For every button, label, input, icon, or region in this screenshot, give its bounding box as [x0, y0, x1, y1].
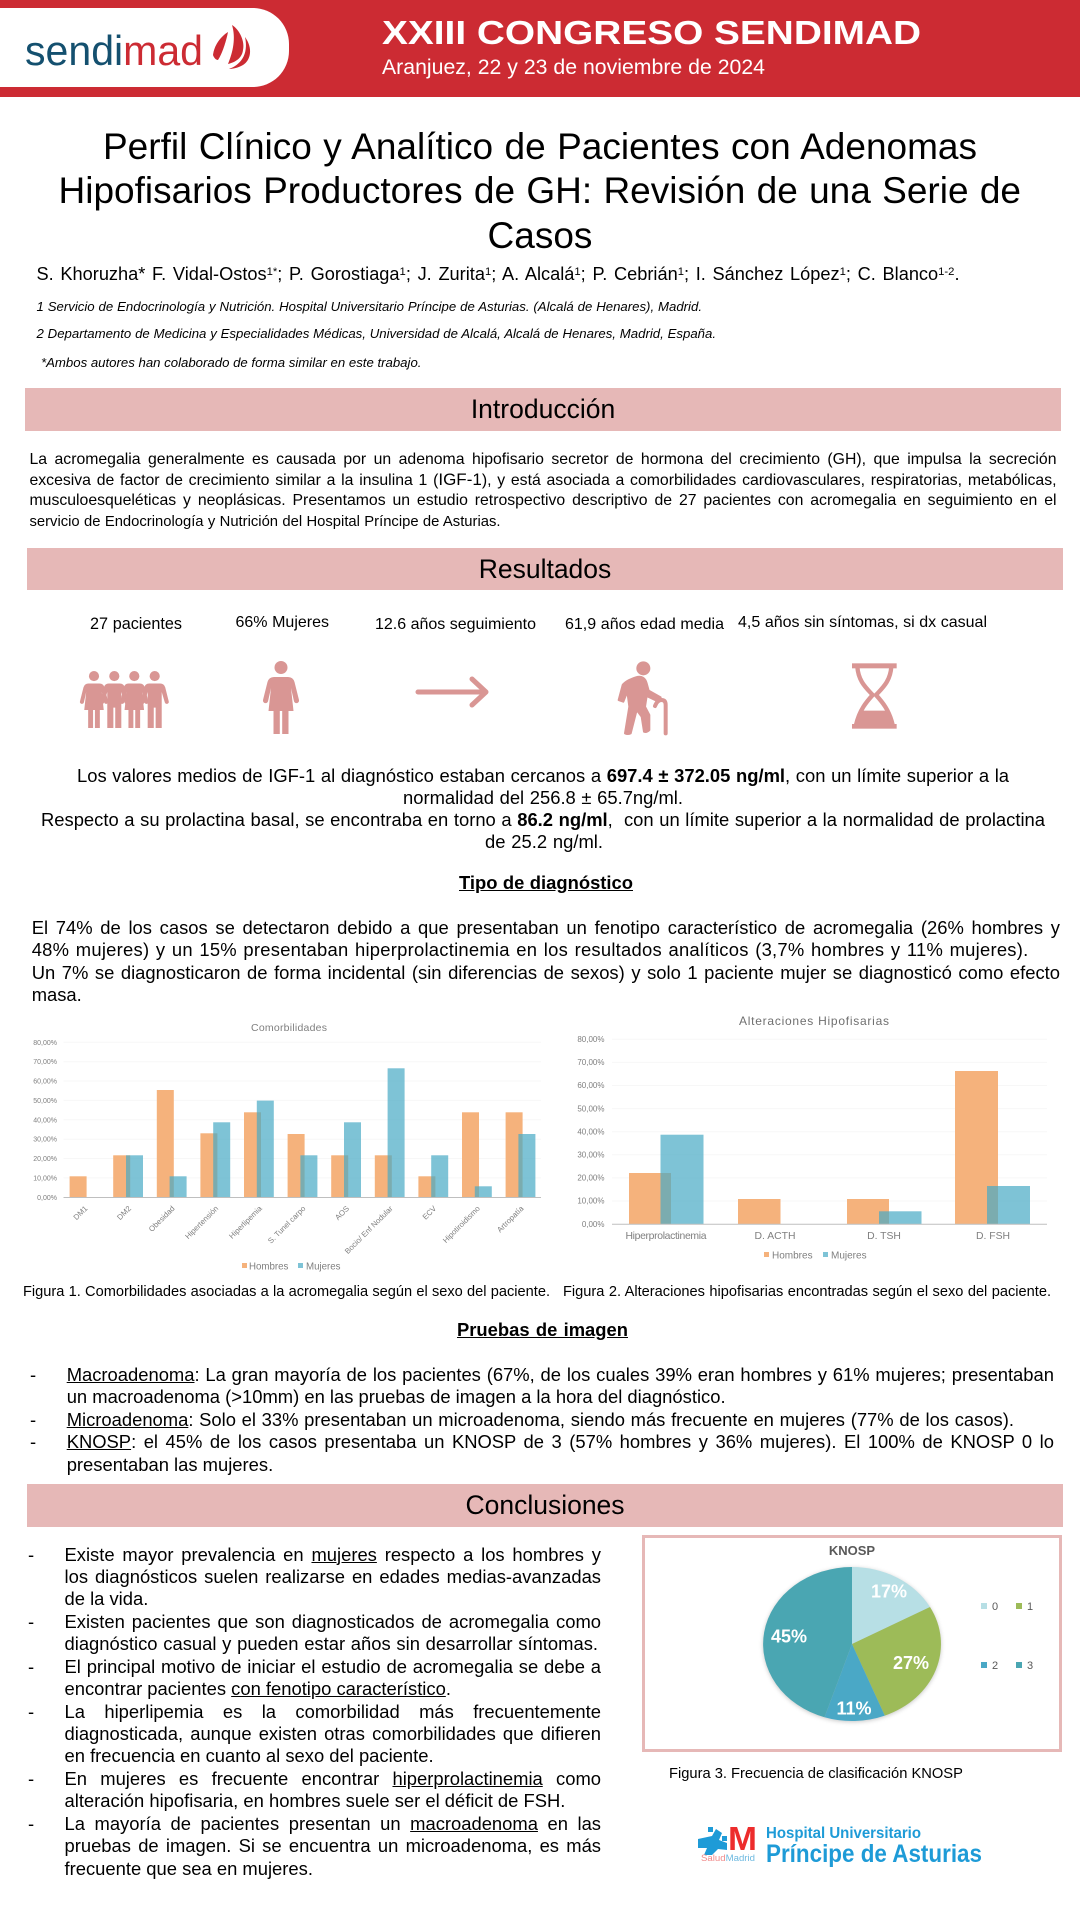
imaging findings list [30, 1364, 1054, 1475]
heading: Resultados: Resultados [479, 554, 611, 584]
y axis and grid: 40,00% [33, 1117, 57, 1124]
y axis and grid: 70,00% [33, 1059, 57, 1066]
list text: pruebas de imagen. Si se encuentra un microadenoma, es más [64, 1835, 601, 1856]
list text: los diagnósticos suelen realizarse en edades medias-avanzadas [64, 1566, 601, 1587]
title: Perfil Clínico y Analítico de Pacientes con Adenomas [103, 126, 977, 166]
slice values: 27% [893, 1653, 929, 1673]
list text: Existen pacientes que son diagnosticados de acromegalia como [64, 1611, 601, 1632]
category labels: AOS [333, 1204, 351, 1222]
legend: 0 [992, 1601, 998, 1613]
affiliations: 2 Departamento de Medicina y Especialidades Médicas, Universidad de Alcalá, Alcalá de Henares, Madrid, España. [36, 326, 716, 341]
list text: alteración hipofisaria, en hombres suele ser el déficit de FSH. [64, 1790, 565, 1811]
legend: Hombres [772, 1250, 813, 1262]
diagnosis text: masa. [32, 984, 82, 1005]
y axis and grid: 60,00% [577, 1081, 604, 1090]
diagnosis text: 48% mujeres) y un 15% presentaban hiperprolactinemia en los resultados analíticos (3,7% hombres y 11% mujeres). [32, 939, 1028, 960]
list text: La hiperlipemia es la comorbilidad más frecuentemente [64, 1701, 601, 1722]
caption: figura 3: Figura 3. Frecuencia de clasificación KNOSP [669, 1766, 963, 1782]
heading: Introducción: Introducción [471, 394, 615, 424]
intro paragraph: excesiva de factor de crecimiento similar a la insulina 1 (IGF-1), y está asociada a comorbilidades cardiovasculares, respiratorias, metabólicas, [30, 470, 1057, 489]
y axis and grid: 30,00% [33, 1137, 57, 1144]
legend: 1 [1027, 1601, 1033, 1613]
y axis and grid: 70,00% [577, 1058, 604, 1067]
icon: elderly person with cane [618, 661, 668, 736]
legend: Mujeres [831, 1250, 867, 1262]
header banner [0, 0, 1080, 97]
y axis and grid: 50,00% [33, 1098, 57, 1105]
category labels: Obesidad [147, 1204, 177, 1234]
title: Hipofisarios Productores de GH: Revisión de una Serie de [58, 170, 1021, 211]
list dash markers: - [30, 1431, 36, 1452]
logo: Hospital Universitario Príncipe de Asturias: SaludMadrid [701, 1853, 755, 1863]
intro paragraph: La acromegalia generalmente es causada por un adenoma hipofisario secretor de hormona del crecimiento (GH), que impulsa la secreción [30, 451, 1056, 468]
caption: figura 1: Figura 1. Comorbilidades asociadas a la acromegalia según el sexo del paciente. [23, 1284, 550, 1300]
stat label: 12.6 años seguimiento: 12.6 años seguimiento [375, 616, 536, 633]
logo: Hospital Universitario Príncipe de Asturias [698, 1822, 982, 1868]
y axis and grid: 0,00% [582, 1220, 604, 1229]
category labels: DM2 [115, 1204, 133, 1222]
category labels: Artropatía [495, 1204, 526, 1234]
slice values: 45% [771, 1626, 807, 1646]
category labels: D. TSH [867, 1231, 901, 1242]
y axis and grid: 80,00% [33, 1040, 57, 1047]
list text: frecuente que sea en mujeres. [64, 1858, 313, 1879]
list text: diagnosticada, aunque existen otras comorbilidades que difieren [64, 1723, 601, 1744]
diagnosis text: Un 7% se diagnosticaron de forma incidental (sin diferencias de sexos) y solo 1 paciente mujer se diagnosticó como efecto [32, 962, 1060, 983]
congress title [382, 15, 921, 79]
y axis and grid: 40,00% [577, 1127, 604, 1136]
legend: Mujeres [306, 1262, 341, 1272]
IGF-1 and prolactin text [41, 764, 1045, 852]
bar chart: Comorbilidades [33, 1022, 541, 1272]
slice values: 17% [871, 1582, 907, 1602]
logo panel: sendimad [0, 8, 289, 87]
legend [242, 1262, 341, 1272]
affiliations: 1 Servicio de Endocrinología y Nutrición. Hospital Universitario Príncipe de Asturias. (Alcalá de Henares), Madrid. [36, 299, 702, 314]
list text [64, 1544, 601, 1879]
intro paragraph [30, 451, 1057, 530]
affiliations: *Ambos autores han colaborado de forma similar en este trabajo. [41, 355, 421, 370]
slice values [771, 1582, 929, 1718]
IGF-1 and prolactin text: normalidad del 256.8 ± 65.7ng/ml. [403, 787, 683, 808]
chart title: Alteraciones Hipofisarias [739, 1014, 889, 1028]
list text: Microadenoma: Solo el 33% presentaban un microadenoma, siendo más frecuente en mujeres (77% de los casos). [67, 1409, 1014, 1430]
list dash markers: - [28, 1544, 34, 1564]
category labels: Hiperprolactinemia [626, 1231, 707, 1242]
list text: Macroadenoma: La gran mayoría de los pacientes (67%, de los cuales 39% eran hombres y 61% mujeres; presentaban [67, 1364, 1054, 1385]
list text: diagnóstico casual y pueden estar años sin desarrollar síntomas. [64, 1633, 598, 1654]
y axis and grid: 20,00% [577, 1174, 604, 1183]
category labels: S. Tunel carpo [266, 1204, 307, 1245]
pie chart panel: KNOSP [642, 1535, 1062, 1752]
list dash markers: - [30, 1364, 36, 1385]
category labels: D. ACTH [754, 1231, 796, 1242]
list dash markers [30, 1364, 36, 1452]
bars: Hombres [629, 1071, 998, 1224]
subheading: Tipo de diagnóstico: Tipo de diagnóstico [459, 872, 633, 893]
category labels: Hiperlipemia [227, 1204, 264, 1241]
legend [764, 1250, 867, 1262]
category labels: DM1 [72, 1204, 89, 1222]
stat label: 66% Mujeres: 66% Mujeres [236, 614, 329, 631]
slice values: 11% [836, 1698, 872, 1718]
diagnosis text: El 74% de los casos se detectaron debido a que presentaban un fenotipo característico de acromegalia (26% hombres y [32, 917, 1060, 938]
heading: Introducción [25, 388, 1061, 431]
intro paragraph: servicio de Endocrinología y Nutrición del Hospital Príncipe de Asturias. [30, 514, 500, 530]
IGF-1 and prolactin text: Los valores medios de IGF-1 al diagnóstico estaban cercanos a 697.4 ± 372.05 ng/ml, con un límite superior a la [77, 764, 1009, 786]
list text: El principal motivo de iniciar el estudio de acromegalia se debe a [64, 1656, 601, 1677]
list dash markers: - [30, 1409, 36, 1430]
bars: Mujeres [660, 1135, 1030, 1224]
title [58, 126, 1021, 256]
y axis and grid: 10,00% [577, 1197, 604, 1206]
icon: woman [263, 661, 299, 734]
heading: Resultados [27, 548, 1063, 590]
authors: S. Khoruzha* F. Vidal-Ostos1*; P. Gorostiaga1; J. Zurita1; A. Alcalá1; P. Cebrián1; I. Sánchez López1; C. Blanco1-2. [36, 264, 960, 284]
y axis and grid: 20,00% [33, 1156, 57, 1163]
pie chart [761, 1543, 1033, 1724]
category labels: Hipertensión [183, 1204, 220, 1241]
y axis and grid [577, 1035, 1047, 1229]
list text: encontrar pacientes con fenotipo característico. [64, 1678, 451, 1699]
category labels: Bocio/ Enf Nodular [343, 1204, 395, 1256]
icon: arrow [416, 676, 488, 708]
heading: Conclusiones: Conclusiones [465, 1490, 625, 1520]
category labels [72, 1203, 526, 1256]
logo: Hospital Universitario Príncipe de Asturias: Hospital Universitario [766, 1825, 921, 1842]
IGF-1 and prolactin text: de 25.2 ng/ml. [485, 831, 603, 852]
list dash markers [28, 1544, 34, 1834]
pie slices [763, 1567, 941, 1721]
conclusions list [28, 1544, 601, 1879]
y axis and grid: 10,00% [33, 1175, 57, 1182]
stat label: 4,5 años sin síntomas: 4,5 años sin síntomas, si dx casual [738, 614, 987, 631]
legend: Hombres [249, 1262, 288, 1272]
legend [981, 1601, 1033, 1672]
category labels [626, 1231, 1010, 1242]
stat label: 61,9 años edad media: 61,9 años edad media [565, 616, 724, 633]
legend: 2 [992, 1660, 998, 1672]
y axis and grid: 80,00% [577, 1035, 604, 1044]
congress title: Aranjuez, 22 y 23 de noviembre de 2024 [382, 56, 765, 79]
list text [66, 1364, 1054, 1475]
y axis and grid: 60,00% [33, 1078, 57, 1086]
list dash markers: - [28, 1611, 34, 1632]
y axis and grid: 50,00% [577, 1104, 604, 1113]
category labels: Hipotiroidismo [441, 1204, 482, 1245]
subheading: Pruebas de imagen: Pruebas de imagen [457, 1319, 628, 1340]
heading: Conclusiones [27, 1484, 1063, 1527]
logo: sendimad wordmark and sail: sendimad [25, 27, 203, 74]
y axis and grid: 0,00% [37, 1195, 57, 1202]
intro paragraph: musculoesqueléticas y neoplásicas. Presentamos un estudio retrospectivo descriptivo de 27 pacientes con acromegalia en seguimiento en el [30, 492, 1056, 509]
bars: Hombres [70, 1090, 523, 1197]
chart title: KNOSP [829, 1543, 875, 1558]
title: Casos [488, 215, 592, 256]
list text: en frecuencia en cuanto al sexo del paciente. [64, 1745, 434, 1766]
list text: Existe mayor prevalencia en mujeres respecto a los hombres y [64, 1544, 601, 1564]
bar chart: Alteraciones Hipofisarias [577, 1014, 1047, 1262]
category labels: D. FSH [976, 1231, 1010, 1242]
icon: hourglass [852, 663, 897, 729]
y axis and grid: 30,00% [577, 1150, 604, 1160]
list text: La mayoría de pacientes presentan un macroadenoma en las [64, 1813, 601, 1834]
list text: un macroadenoma (>10mm) en las pruebas de imagen a la hora del diagnóstico. [67, 1386, 726, 1407]
category labels: ECV [421, 1203, 439, 1222]
list dash markers: - [28, 1700, 34, 1722]
legend: 3 [1027, 1660, 1033, 1672]
congress title: XXIII CONGRESO SENDIMAD [382, 15, 921, 52]
y axis and grid [33, 1040, 541, 1202]
list text: de la vida. [64, 1588, 148, 1609]
bars: Mujeres [126, 1068, 535, 1197]
diagnosis text [32, 917, 1060, 1005]
chart title: Comorbilidades [251, 1022, 327, 1034]
list dash markers: - [28, 1813, 34, 1834]
IGF-1 and prolactin text: Respecto a su prolactina basal, se encontraba en torno a 86.2 ng/ml, con un límite superior a la normalidad de prolactina [41, 809, 1045, 830]
list text: En mujeres es frecuente encontrar hiperprolactinemia como [64, 1768, 601, 1789]
icon: group of four people [80, 671, 169, 728]
list dash markers: - [28, 1656, 34, 1677]
list text: KNOSP: el 45% de los casos presentaba un KNOSP de 3 (57% hombres y 36% mujeres). El 100% de KNOSP 0 lo [67, 1431, 1054, 1452]
list text: presentaban las mujeres. [67, 1454, 273, 1475]
affiliations [36, 299, 716, 370]
list dash markers: - [28, 1768, 34, 1789]
caption: figura 2: Figura 2. Alteraciones hipofisarias encontradas según el sexo del paciente. [563, 1284, 1051, 1300]
stat label: 27 pacientes: 27 pacientes [90, 615, 182, 633]
